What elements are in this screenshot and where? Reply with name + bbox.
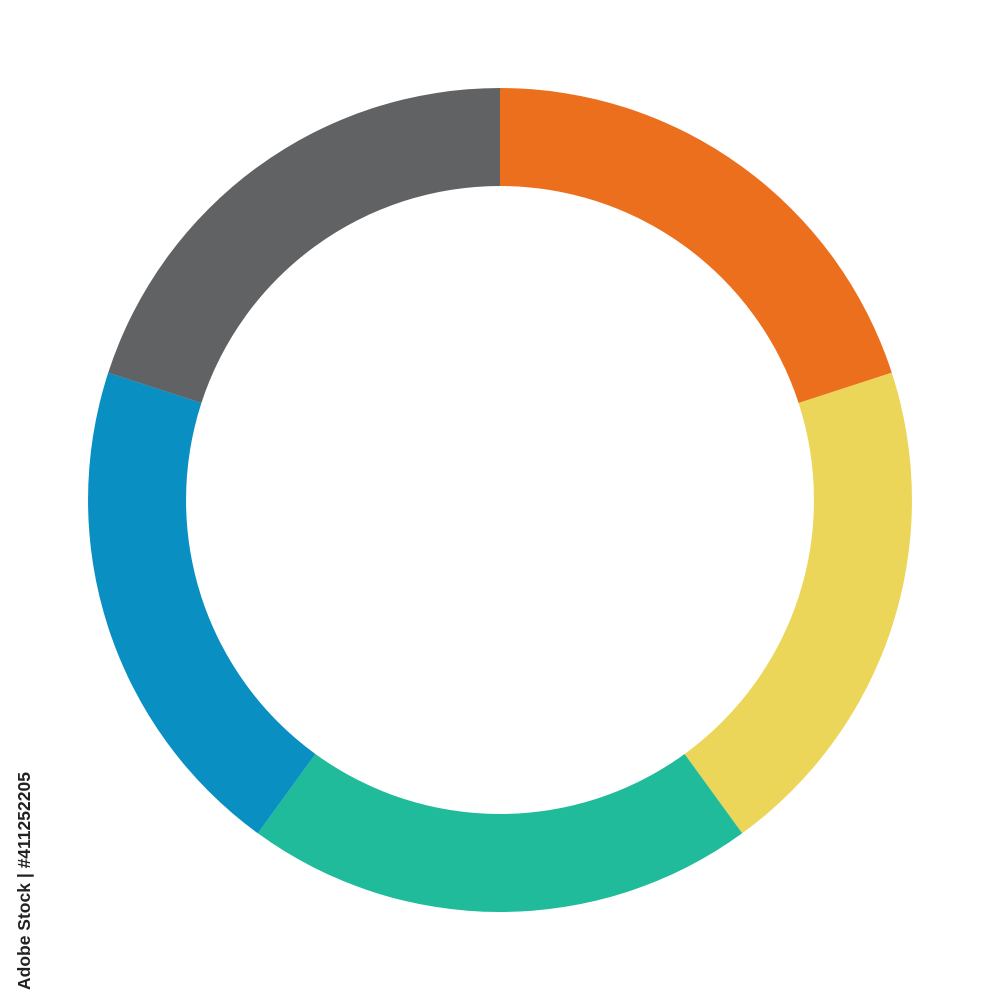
segment: blue [88,373,315,833]
segment: yellow [685,373,912,833]
segment: gray [108,88,500,403]
segment: orange [500,88,892,403]
segment: teal [258,754,742,912]
side caption: Adobe Stock | #411252205 [14,772,34,990]
